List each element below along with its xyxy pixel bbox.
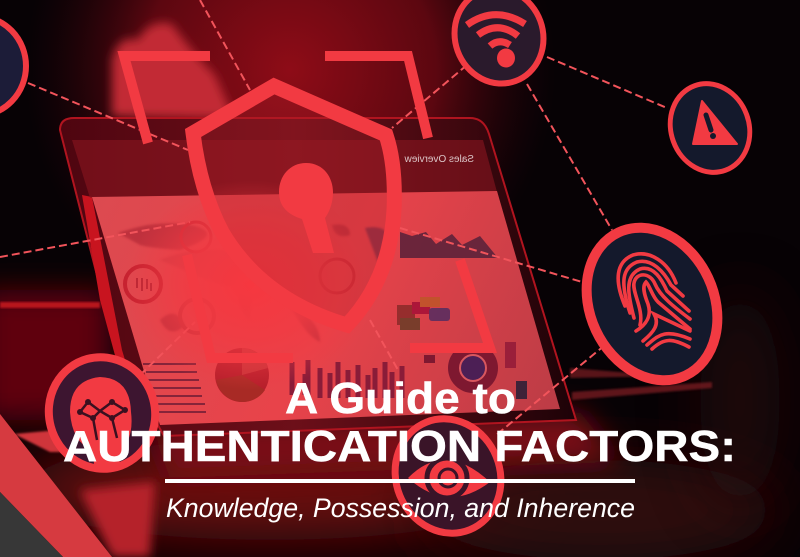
dashed connector lines xyxy=(0,0,667,436)
title line 1: A Guide to xyxy=(285,374,516,423)
bottom-left corner shapes xyxy=(0,414,155,557)
laptop screen panel xyxy=(92,191,560,425)
subtitle: Knowledge, Possession, and Inherence xyxy=(166,493,635,523)
laptop top bar xyxy=(72,140,497,198)
central red glow xyxy=(125,180,375,390)
laptop xyxy=(60,118,576,436)
blurred hand xyxy=(112,23,234,118)
icon: eye xyxy=(378,403,518,549)
side swatches xyxy=(424,342,527,399)
icon: partial circle left xyxy=(0,16,26,116)
icon: skull xyxy=(36,345,168,481)
large donut xyxy=(448,343,498,393)
icon: fingerprint xyxy=(562,206,742,402)
shield outline xyxy=(193,86,394,325)
laptop header label: Sales Overview xyxy=(404,154,474,165)
laptop keyboard base xyxy=(0,302,712,478)
world map silhouette xyxy=(118,223,386,342)
corner brackets xyxy=(124,56,490,358)
colored blocks xyxy=(397,297,450,330)
laptop bezel xyxy=(60,118,576,436)
icon: warning xyxy=(658,72,762,184)
title xyxy=(63,374,736,471)
shield with keyhole xyxy=(193,86,394,325)
left bezel highlight xyxy=(82,195,136,396)
keyhole xyxy=(279,163,334,253)
donut charts xyxy=(125,222,354,333)
icon: wifi xyxy=(441,0,557,96)
title line 2: AUTHENTICATION FACTORS: xyxy=(63,422,736,471)
pie chart xyxy=(215,348,269,402)
area chart xyxy=(400,232,503,258)
table rows xyxy=(143,364,206,412)
bar chart xyxy=(292,360,402,398)
divider rule xyxy=(165,479,635,483)
